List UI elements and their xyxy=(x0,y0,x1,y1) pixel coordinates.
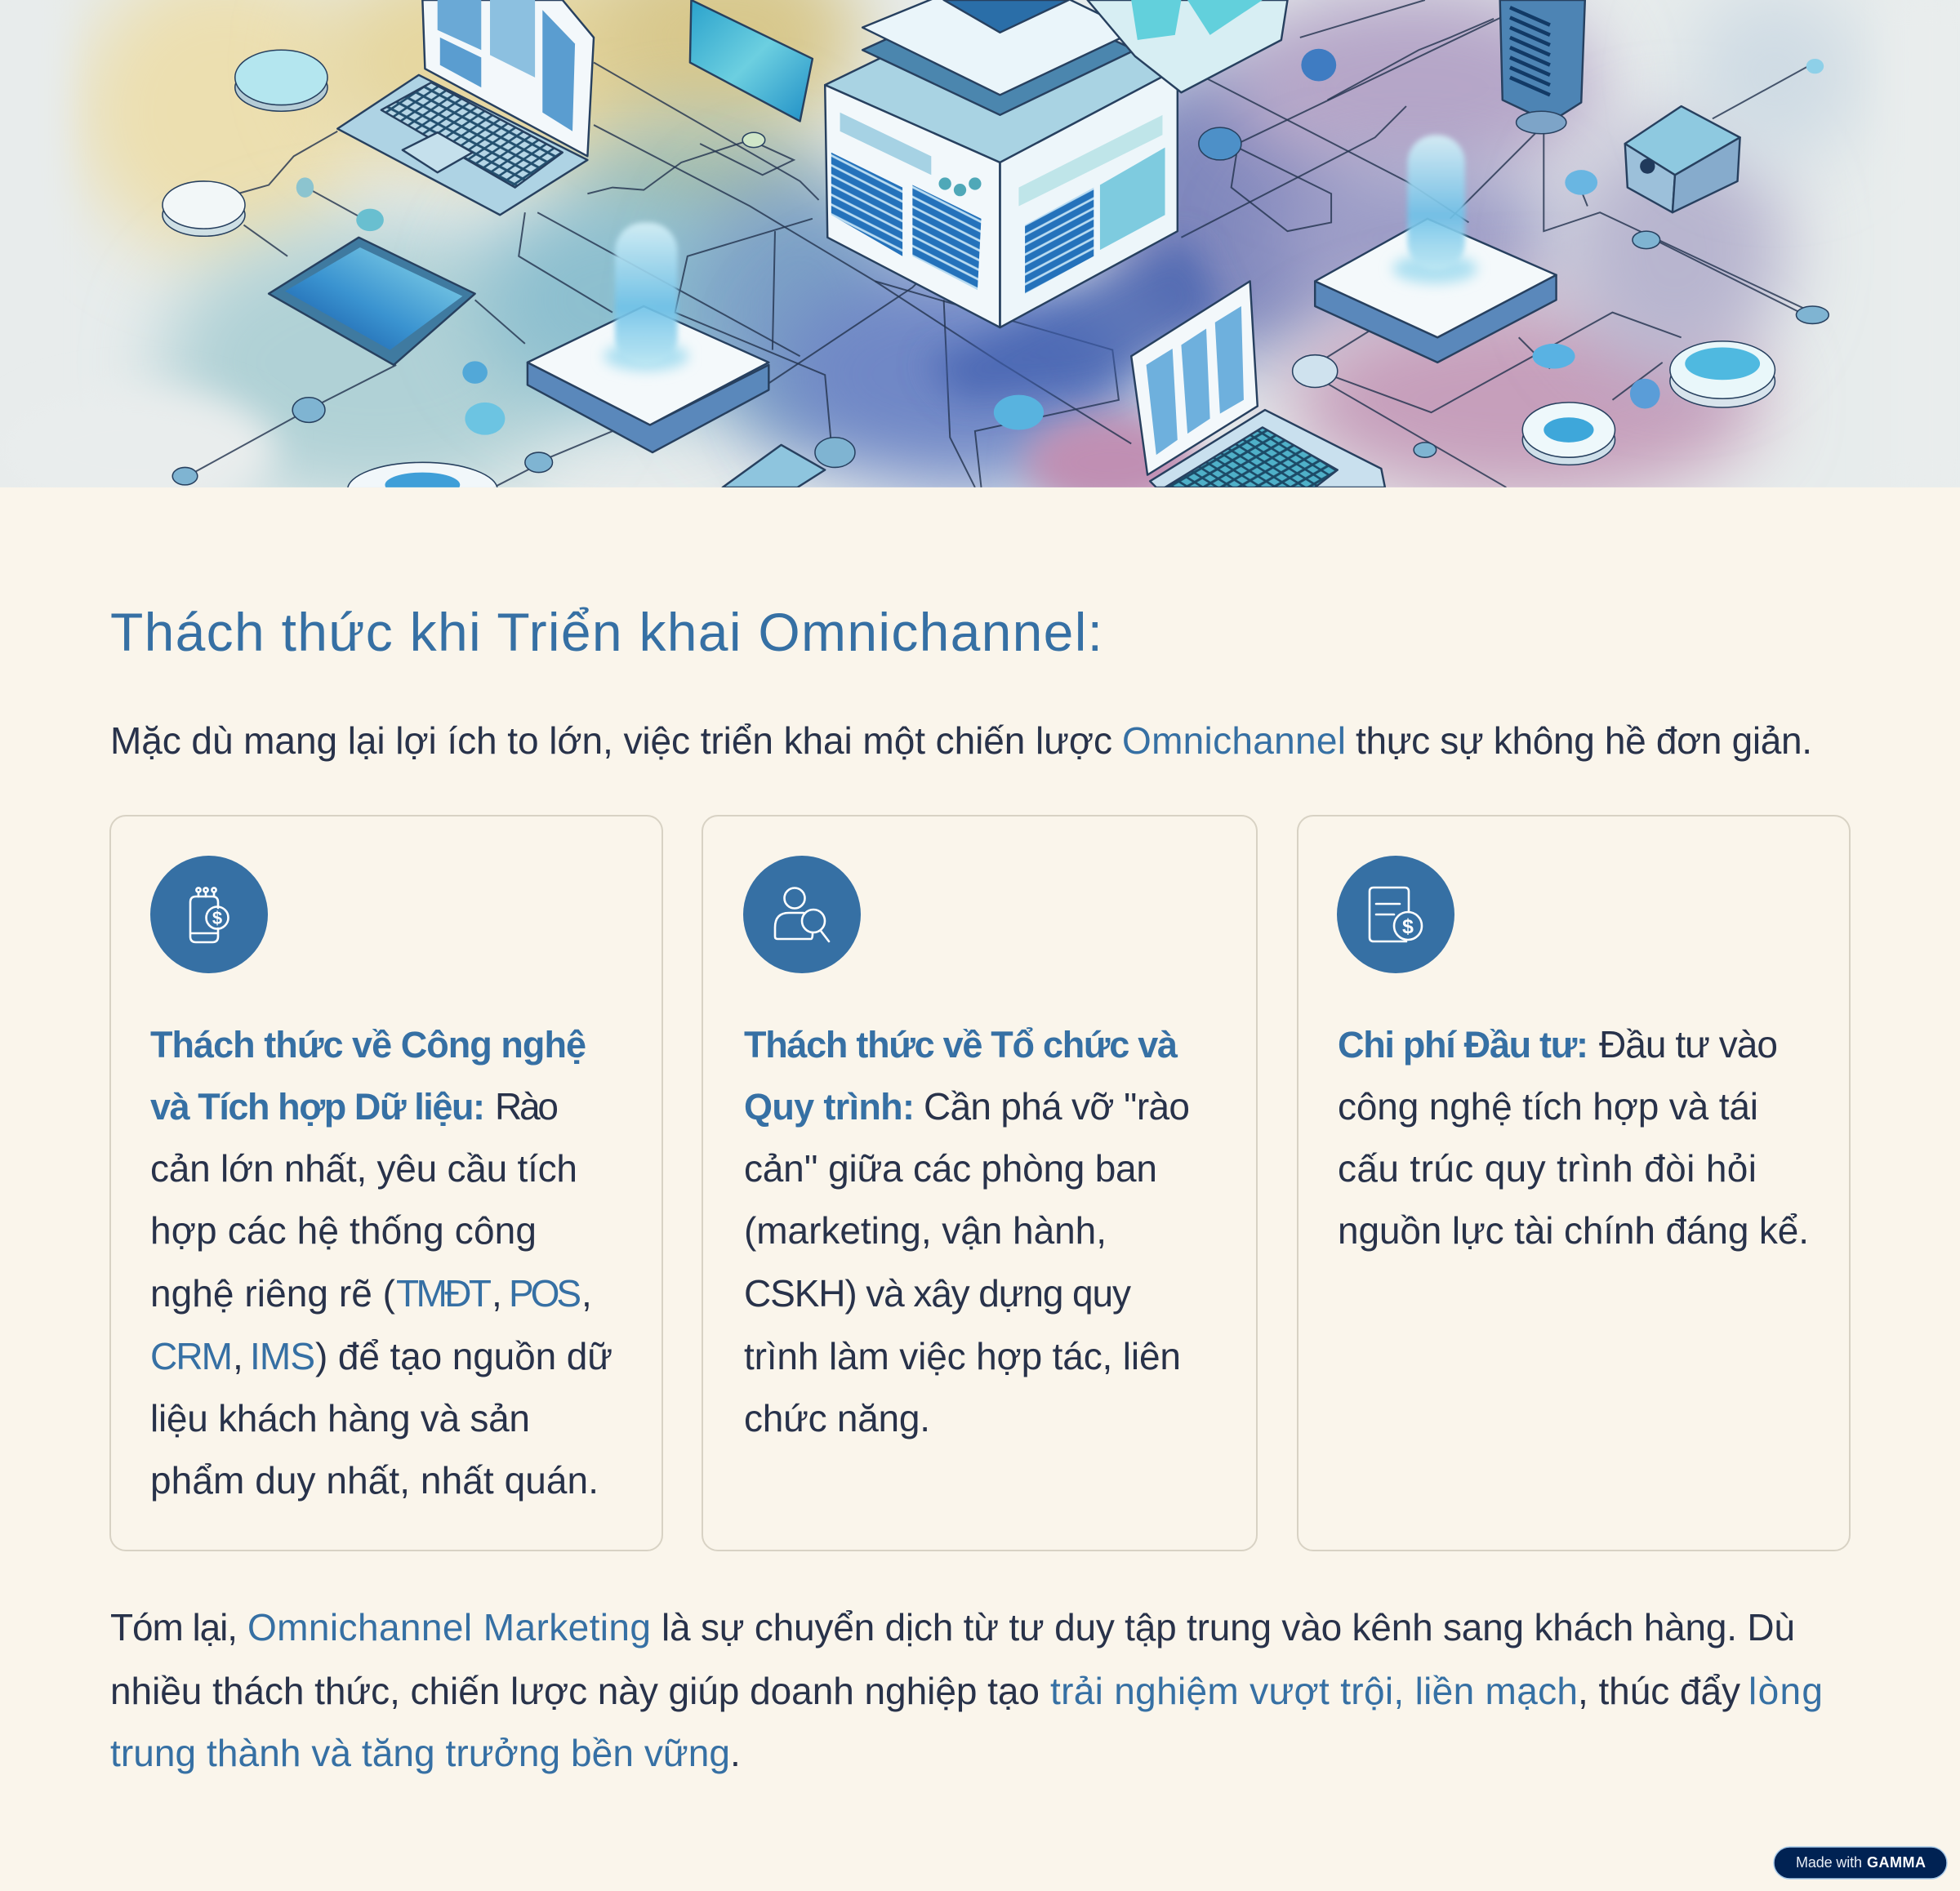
card text: organization: trình làm việc hợp tác, liên xyxy=(744,1335,1181,1377)
card text: organization: Thách thức về Tổ chức và xyxy=(744,1024,1178,1066)
conclusion paragraph: Omnichannel Marketing xyxy=(247,1606,651,1649)
card text: organization: Quy trình: xyxy=(744,1086,915,1128)
card text: technology xyxy=(150,1024,612,1502)
card text: cost: Chi phí Đầu tư: xyxy=(1338,1024,1588,1066)
card text: technology: , xyxy=(581,1272,592,1315)
card text: technology: hợp các hệ thống công xyxy=(150,1209,537,1252)
small cube device right xyxy=(1625,106,1740,212)
card text: organization: Cần phá vỡ ''rào xyxy=(924,1085,1190,1128)
network connection lines xyxy=(185,0,1815,487)
conclusion paragraph: , thúc đẩy xyxy=(1578,1670,1740,1712)
panel: organization and process challenge xyxy=(702,816,1257,1551)
card text: technology: ) để tạo nguồn dữ xyxy=(315,1335,612,1377)
card text: organization: cản'' giữa các phòng ban xyxy=(744,1147,1157,1190)
panel: investment cost challenge xyxy=(1298,816,1850,1551)
server cube top right xyxy=(1088,0,1288,92)
card text: technology: nghệ riêng rẽ ( xyxy=(150,1272,396,1315)
intro paragraph xyxy=(110,719,1812,762)
watercolor wash background xyxy=(0,0,1960,513)
conclusion paragraph: Tóm lại, xyxy=(110,1606,238,1649)
conclusion paragraph: . xyxy=(730,1732,741,1774)
card text: organization xyxy=(744,1024,1190,1439)
card text: technology: Thách thức về Công nghệ xyxy=(150,1024,586,1066)
icon: document with dollar coin xyxy=(1337,856,1454,973)
card text: technology: phẩm duy nhất, nhất quán. xyxy=(150,1459,599,1502)
card text: technology: Rào xyxy=(495,1085,559,1128)
card text: cost: Đầu tư vào xyxy=(1599,1023,1778,1066)
hero illustration: connected devices in watercolor xyxy=(0,0,1960,518)
conclusion paragraph xyxy=(110,1606,1823,1774)
card text: technology: CRM xyxy=(150,1335,233,1377)
card text: technology: cản lớn nhất, yêu cầu tích xyxy=(150,1147,577,1190)
card text: technology: , xyxy=(233,1335,243,1377)
badge: made with gamma xyxy=(1774,1847,1947,1879)
small device bottom xyxy=(723,445,825,487)
card text: technology: và Tích hợp Dữ liệu: xyxy=(150,1086,485,1128)
conclusion paragraph: trải nghiệm vượt trội, liền mạch xyxy=(1050,1670,1578,1712)
laptop bottom center xyxy=(1131,281,1385,487)
icon: phone with dollar coin: $ xyxy=(212,908,222,928)
badge: made with gamma: Made with xyxy=(1796,1854,1862,1871)
icon: phone with dollar coin xyxy=(150,856,268,973)
card text: technology: POS xyxy=(509,1272,581,1315)
card text: technology: IMS xyxy=(250,1335,315,1377)
tablet top center xyxy=(690,0,813,121)
network nodes xyxy=(172,49,1829,485)
intro paragraph: Mặc dù mang lại lợi ích to lớn, việc triển khai một chiến lược xyxy=(110,719,1112,762)
tablet left xyxy=(269,238,475,365)
heading: Thách thức khi Triển khai Omnichannel: xyxy=(110,602,1102,662)
conclusion paragraph: trung thành và tăng trưởng bền vững xyxy=(110,1732,730,1774)
conclusion paragraph: là sự chuyển dịch từ tư duy tập trung vào kênh sang khách hàng. Dù xyxy=(662,1606,1795,1649)
card text: technology: TMĐT xyxy=(396,1272,492,1315)
intro paragraph: thực sự không hề đơn giản. xyxy=(1356,719,1812,762)
platform with hologram right xyxy=(1315,135,1557,363)
round disk devices xyxy=(163,50,1775,518)
panel: technology and data integration challenge xyxy=(110,816,662,1551)
card text: cost: công nghệ tích hợp và tái xyxy=(1338,1085,1758,1128)
icon: person with magnifier xyxy=(743,856,861,973)
laptop top left xyxy=(337,0,594,215)
card text: cost: nguồn lực tài chính đáng kể. xyxy=(1338,1209,1809,1252)
conclusion paragraph: nhiều thách thức, chiến lược này giúp doanh nghiệp tạo xyxy=(110,1670,1040,1712)
card text: organization: CSKH) và xây dựng quy xyxy=(744,1272,1131,1315)
card text: cost: cấu trúc quy trình đòi hỏi xyxy=(1338,1147,1757,1190)
central server cube xyxy=(825,0,1225,400)
icon: document with dollar coin: $ xyxy=(1402,915,1414,938)
card text: technology: liệu khách hàng và sản xyxy=(150,1397,530,1439)
badge: made with gamma: GAMMA xyxy=(1867,1854,1926,1871)
card text: technology: , xyxy=(492,1272,502,1315)
card text: organization: (marketing, vận hành, xyxy=(744,1209,1107,1252)
platform with hologram left xyxy=(528,222,768,452)
intro paragraph: Omnichannel xyxy=(1122,719,1346,762)
conclusion paragraph: lòng xyxy=(1748,1670,1823,1712)
server tower xyxy=(1500,0,1585,134)
card text: cost xyxy=(1338,1023,1809,1252)
card text: organization: chức năng. xyxy=(744,1397,930,1439)
